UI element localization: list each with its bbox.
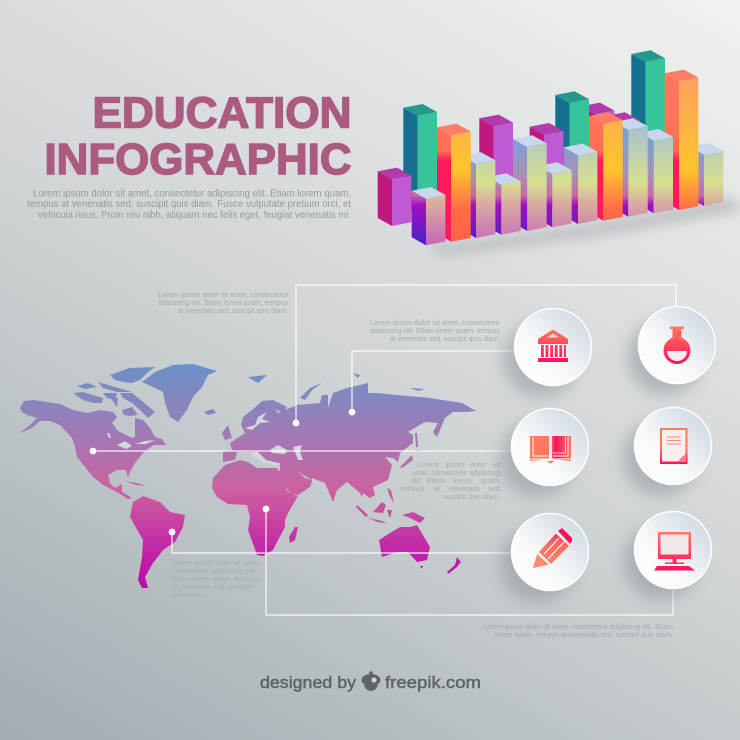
caption: center justified: elit. [411, 476, 422, 485]
footer credit [260, 673, 481, 692]
circle: museum icon [503, 308, 592, 397]
european and arctic islands [222, 373, 425, 543]
connector lines [93, 285, 676, 615]
caption: top left [158, 290, 289, 315]
arctic islands and greenland [73, 364, 217, 486]
caption: center justified: at [434, 484, 440, 493]
caption: center justified: sed, [488, 484, 502, 493]
inland seas [107, 412, 312, 480]
north america [20, 400, 166, 499]
caption: center justified: amet, consectetur adipiscing [412, 468, 500, 477]
caption: top left: adipiscing elit. Etiam lorem quam, tempus [158, 298, 288, 307]
footer credit: designed by [260, 673, 357, 692]
caption: bottom right: lorem quam, tempus at venenatis sed, suscipit quis diam. [495, 630, 673, 639]
caption: top left: at venenatis sed, suscipit quis diam. [178, 306, 288, 315]
3D bar chart [378, 50, 740, 256]
caption: lower left: consectetur adipiscing elit. [172, 566, 256, 575]
south america [130, 496, 185, 588]
caption: top center: Lorem ipsum dolor sit amet, consectetur [370, 318, 501, 327]
footer credit: freepik.com [385, 673, 481, 692]
africa [212, 460, 298, 556]
intro text block: Lorem ipsum dolor sit amet, consectetur adipiscing elit. Etiam lorem quam, [33, 188, 351, 200]
australia and oceania [356, 433, 461, 574]
caption: center justified: suscipit quis diam. [443, 492, 500, 501]
world map [20, 364, 476, 588]
circle: book icon [500, 408, 588, 497]
caption: center justified: sit [493, 460, 500, 469]
map markers [90, 409, 355, 535]
circle: document icon [623, 408, 712, 496]
title [44, 88, 352, 184]
circle: pencil icon [500, 514, 588, 602]
caption: center justified: lorem [453, 476, 471, 485]
intro text block: vehicula risus. Proin nisi nibh, aliquam nec felis eget, feugiat venenatis mi. [38, 210, 351, 221]
circle: flask icon [627, 306, 716, 395]
caption: bottom right: Lorem ipsum dolor sit amet, consectetur adipiscing elit. Etiam [483, 622, 673, 631]
caption: center justified: Lorem [418, 460, 438, 469]
title: EDUCATION [92, 88, 352, 138]
caption: lower left: Etiam lorem quam, tempus [172, 574, 258, 583]
freepik logo [362, 671, 380, 691]
caption: lower left: quis diam. [172, 590, 205, 599]
caption: center justified: Etiam [427, 476, 445, 485]
caption: lower left [172, 558, 261, 599]
title: INFOGRAPHIC [44, 135, 352, 184]
caption: center justified: ipsum [445, 460, 464, 469]
intro text block: tempus at venenatis sed, suscipit quis diam. Fusce vulputate pretium orci, et [27, 199, 351, 210]
caption: center justified [401, 460, 502, 501]
caption: center justified: quam, [481, 476, 501, 485]
caption: top center: at venenatis sed, suscipit quis diam. [390, 334, 500, 343]
caption: lower left: Lorem ipsum dolor sit amet, [172, 558, 261, 567]
caption: bottom right [483, 622, 673, 639]
caption: top center [370, 318, 501, 343]
intro text block [27, 188, 351, 221]
eurasia [223, 383, 476, 507]
caption: lower left: at venenatis sed, suscipit [172, 582, 252, 591]
caption: center justified: venenatis [449, 484, 480, 493]
circle: computer icon [623, 512, 712, 600]
caption: top center: adipiscing elit. Etiam lorem quam, tempus [370, 326, 500, 335]
caption: center justified: tempus [401, 484, 425, 493]
caption: center justified: dolor [470, 460, 487, 469]
caption: top left: Lorem ipsum dolor sit amet, consectetur [158, 290, 289, 299]
